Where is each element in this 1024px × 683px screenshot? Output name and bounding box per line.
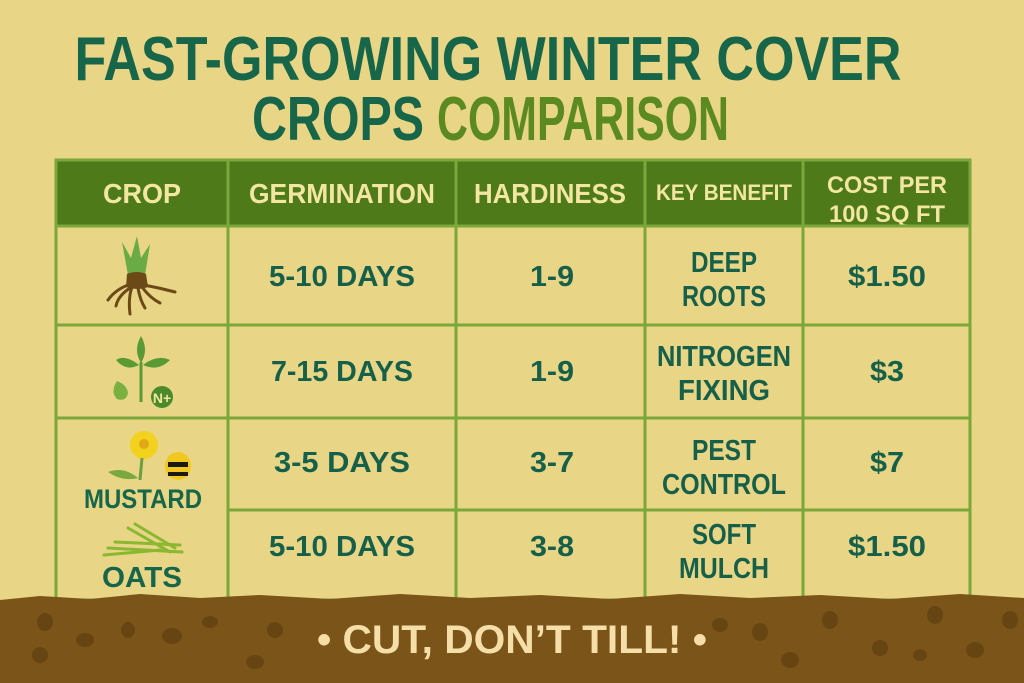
header row: GERMINATION — [249, 178, 435, 209]
data cells: $3 — [870, 356, 904, 388]
icon: clover with N+: N+ — [153, 390, 171, 406]
header row: COST PER — [827, 172, 947, 199]
header row: HARDINESS — [474, 178, 626, 209]
data cells: 5-10 DAYS — [269, 261, 415, 293]
label: oats: OATS — [102, 562, 182, 594]
soil footer — [0, 594, 1024, 683]
title: COMPARISON — [437, 85, 729, 154]
data cells: PEST — [692, 435, 756, 467]
icon: oats straw — [104, 524, 182, 555]
data cells: $1.50 — [848, 531, 926, 563]
data cells: ROOTS — [682, 281, 766, 313]
title — [74, 25, 902, 154]
data cells: NITROGEN — [657, 341, 791, 373]
icon: rye roots — [108, 236, 175, 314]
title: CROPS — [252, 85, 424, 154]
data cells: CONTROL — [662, 469, 786, 501]
data cells: 3-7 — [530, 447, 574, 479]
data cells: SOFT — [692, 519, 756, 551]
slogan: • CUT, DON’T TILL! • — [317, 618, 707, 662]
icon: clover with N+ — [114, 336, 173, 408]
data cells: DEEP — [691, 247, 757, 279]
header row: KEY BENEFIT — [656, 180, 793, 205]
header row — [56, 160, 970, 228]
header row: 100 SQ FT — [829, 201, 945, 228]
data cells: $1.50 — [848, 261, 926, 293]
data cells: $7 — [870, 447, 904, 479]
header row: CROP — [103, 178, 181, 209]
icon: mustard flower and bee — [108, 431, 191, 480]
data cells: 3-5 DAYS — [274, 447, 410, 479]
data cells: 7-15 DAYS — [271, 356, 413, 388]
data cells: FIXING — [678, 375, 770, 407]
table — [56, 160, 970, 600]
data cells: MULCH — [679, 553, 769, 585]
grid — [56, 160, 970, 600]
label: mustard: MUSTARD — [84, 484, 202, 514]
data cells — [269, 247, 926, 585]
data cells: 1-9 — [530, 261, 574, 293]
data cells: 5-10 DAYS — [269, 531, 415, 563]
data cells: 3-8 — [530, 531, 574, 563]
data cells: 1-9 — [530, 356, 574, 388]
